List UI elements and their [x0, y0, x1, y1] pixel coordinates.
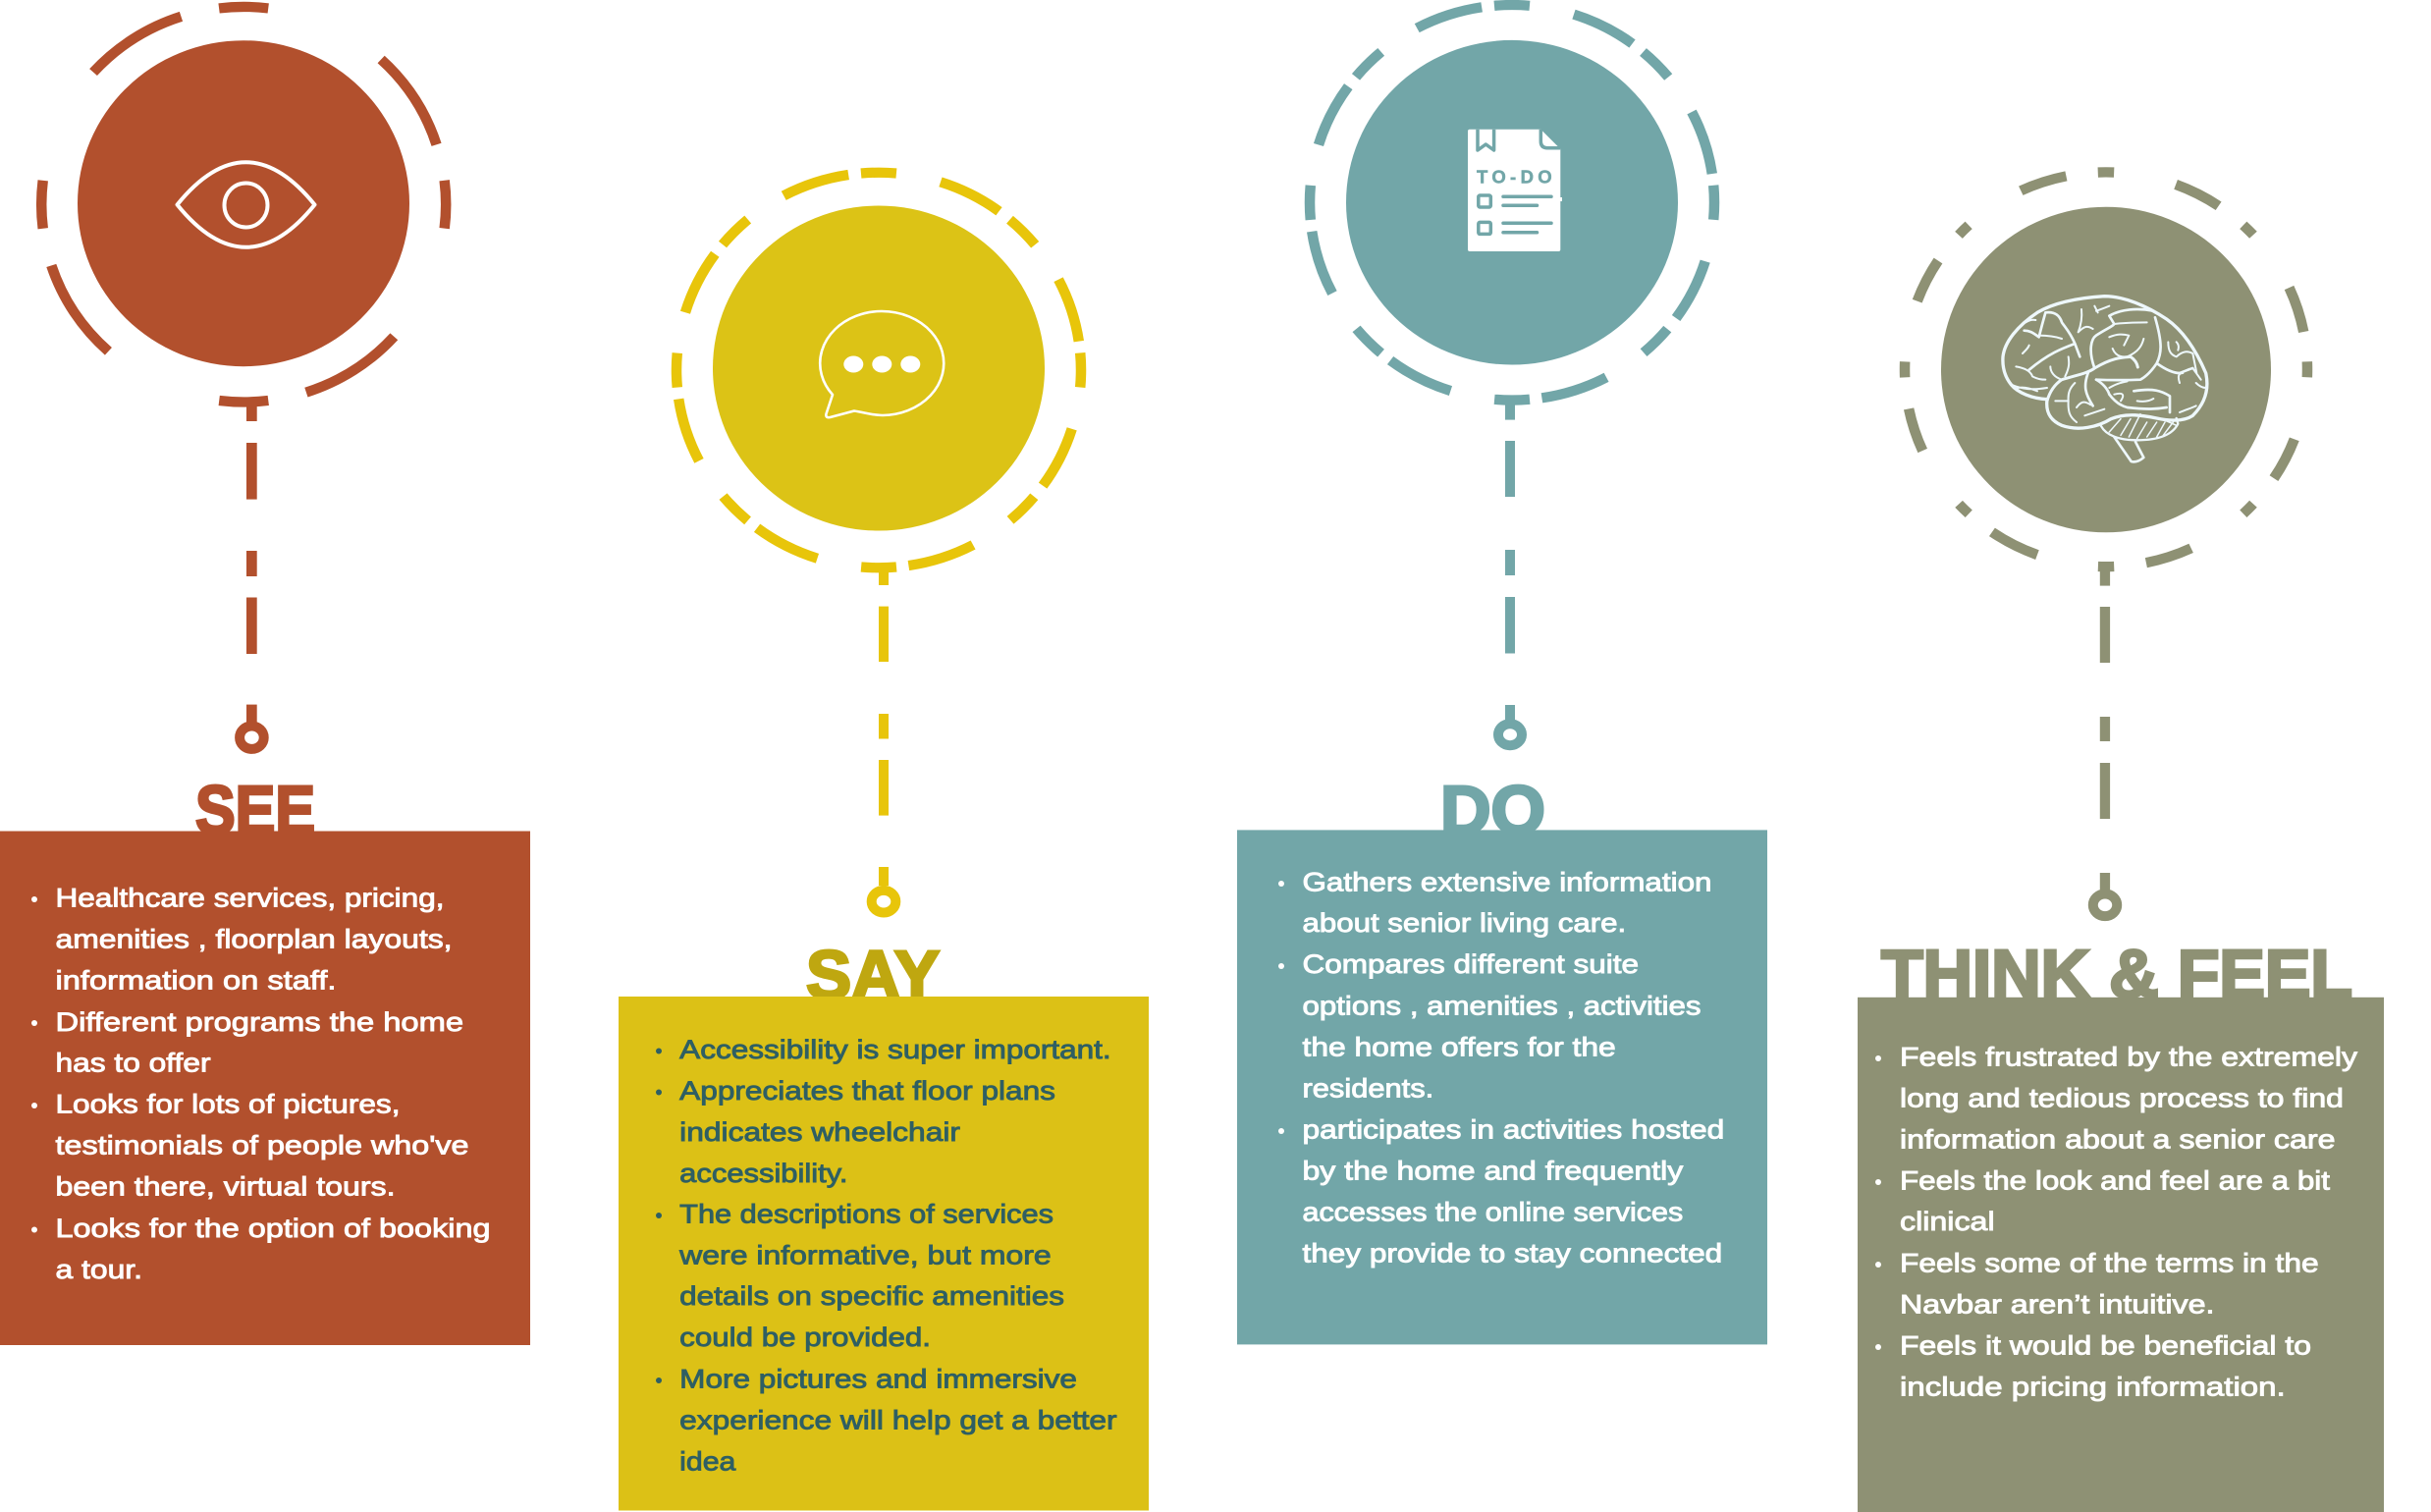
- dashed ring: DO: [1310, 5, 1714, 401]
- text: SAY list: The descriptions of services: [679, 1200, 1053, 1229]
- text: DO list: Compares different suite: [1302, 949, 1639, 979]
- circle: SAY: [713, 206, 1045, 530]
- text: SEE list: been there, virtual tours.: [55, 1172, 395, 1202]
- column: SAY: [619, 173, 1149, 1510]
- icon: eye: [177, 162, 314, 247]
- text: SAY list: accessibility.: [679, 1159, 848, 1188]
- dashed connector: SAY: [879, 569, 889, 886]
- text: SAY list: [678, 1035, 1117, 1476]
- text: THINK & FEEL list: long and tedious process to find: [1900, 1084, 2344, 1113]
- dashed connector: DO: [1505, 403, 1515, 723]
- text: DO list: they provide to stay connected: [1302, 1239, 1722, 1269]
- text: SAY list: experience will help get a better: [679, 1406, 1117, 1435]
- bullets: SEE: [31, 896, 37, 1233]
- dashed connector: SEE: [246, 405, 257, 725]
- panel: DO: [1237, 830, 1767, 1344]
- text: THINK & FEEL list: Feels it would be beneficial to: [1900, 1330, 2311, 1360]
- text: SAY list: indicates wheelchair: [679, 1117, 960, 1147]
- dashed ring: SAY: [676, 173, 1081, 567]
- text: SEE list: has to offer: [55, 1048, 211, 1077]
- title: SEE: SEE: [195, 772, 315, 848]
- text: SEE list: information on staff.: [55, 966, 336, 996]
- text: DO list: by the home and frequently: [1302, 1157, 1684, 1186]
- bullets: THINK & FEEL: [1875, 1055, 1881, 1350]
- text: THINK & FEEL list: [1900, 1042, 2358, 1401]
- bullets: DO: [1278, 881, 1284, 1134]
- text: THINK & FEEL list: include pricing information.: [1900, 1372, 2286, 1401]
- text: DO list: residents.: [1302, 1074, 1433, 1104]
- text: SEE list: testimonials of people who've: [55, 1131, 469, 1161]
- text: SEE list: Healthcare services, pricing,: [55, 884, 444, 913]
- dashed connector: THINK & FEEL: [2100, 567, 2110, 892]
- title: DO: DO: [1440, 772, 1545, 848]
- text: THINK & FEEL list: Feels some of the terms in the: [1900, 1248, 2319, 1277]
- text: THINK & FEEL list: clinical: [1900, 1207, 1995, 1236]
- text: THINK & FEEL list: information about a senior care: [1900, 1124, 2335, 1154]
- text: DO list: options , amenities , activities: [1302, 991, 1701, 1020]
- text: DO list: participates in activities hosted: [1302, 1115, 1724, 1145]
- text: SEE list: Looks for the option of booking: [55, 1214, 491, 1243]
- text: THINK & FEEL list: Feels the look and feel are a bit: [1900, 1166, 2331, 1196]
- text: SEE list: [55, 884, 491, 1284]
- text: SEE list: a tour.: [55, 1255, 142, 1284]
- icon: to-do document: TO-DO: [1477, 167, 1552, 188]
- text: THINK & FEEL list: Feels frustrated by the extremely: [1900, 1042, 2358, 1071]
- icon: brain: [2003, 297, 2207, 461]
- dashed ring: SEE: [41, 7, 446, 402]
- end node: SAY: [872, 891, 895, 913]
- text: SAY list: Appreciates that floor plans: [679, 1076, 1055, 1106]
- text: DO list: [1302, 867, 1724, 1269]
- end node: SEE: [240, 727, 264, 749]
- text: SAY list: details on specific amenities: [679, 1281, 1064, 1311]
- dashed ring: THINK & FEEL: [1905, 172, 2307, 567]
- text: SAY list: could be provided.: [679, 1323, 931, 1352]
- panel: SEE: [0, 831, 530, 1345]
- panel: THINK & FEEL: [1858, 998, 2384, 1512]
- panel: SAY: [619, 997, 1149, 1510]
- text: SAY list: More pictures and immersive: [679, 1365, 1077, 1394]
- text: SAY list: Accessibility is super important.: [679, 1035, 1111, 1064]
- circle: DO: [1346, 40, 1678, 365]
- title: THINK & FEEL: THINK & FEEL: [1881, 936, 2352, 1012]
- text: SEE list: amenities , floorplan layouts,: [55, 925, 452, 954]
- text: SEE list: Looks for lots of pictures,: [55, 1090, 401, 1119]
- text: DO list: accesses the online services: [1302, 1197, 1683, 1226]
- circle: SEE: [78, 40, 409, 366]
- title: SAY: SAY: [806, 937, 940, 1013]
- text: DO list: the home offers for the: [1302, 1032, 1616, 1061]
- text: THINK & FEEL list: Navbar aren’t intuitive.: [1900, 1290, 2215, 1320]
- column: SEE: [0, 7, 530, 1345]
- text: SEE list: Different programs the home: [55, 1007, 463, 1037]
- column: DO: [1237, 5, 1767, 1344]
- circle: THINK & FEEL: [1941, 207, 2271, 532]
- text: DO list: about senior living care.: [1302, 908, 1626, 938]
- text: DO list: Gathers extensive information: [1302, 867, 1712, 896]
- icon: to-do document: [1468, 130, 1562, 251]
- end node: DO: [1498, 724, 1522, 745]
- icon: speech bubble: [820, 311, 944, 417]
- text: SAY list: were informative, but more: [678, 1241, 1052, 1270]
- end node: THINK & FEEL: [2093, 893, 2117, 916]
- column: THINK & FEEL: [1858, 172, 2384, 1512]
- text: SAY list: idea: [679, 1446, 737, 1476]
- bullets: SAY: [656, 1049, 662, 1383]
